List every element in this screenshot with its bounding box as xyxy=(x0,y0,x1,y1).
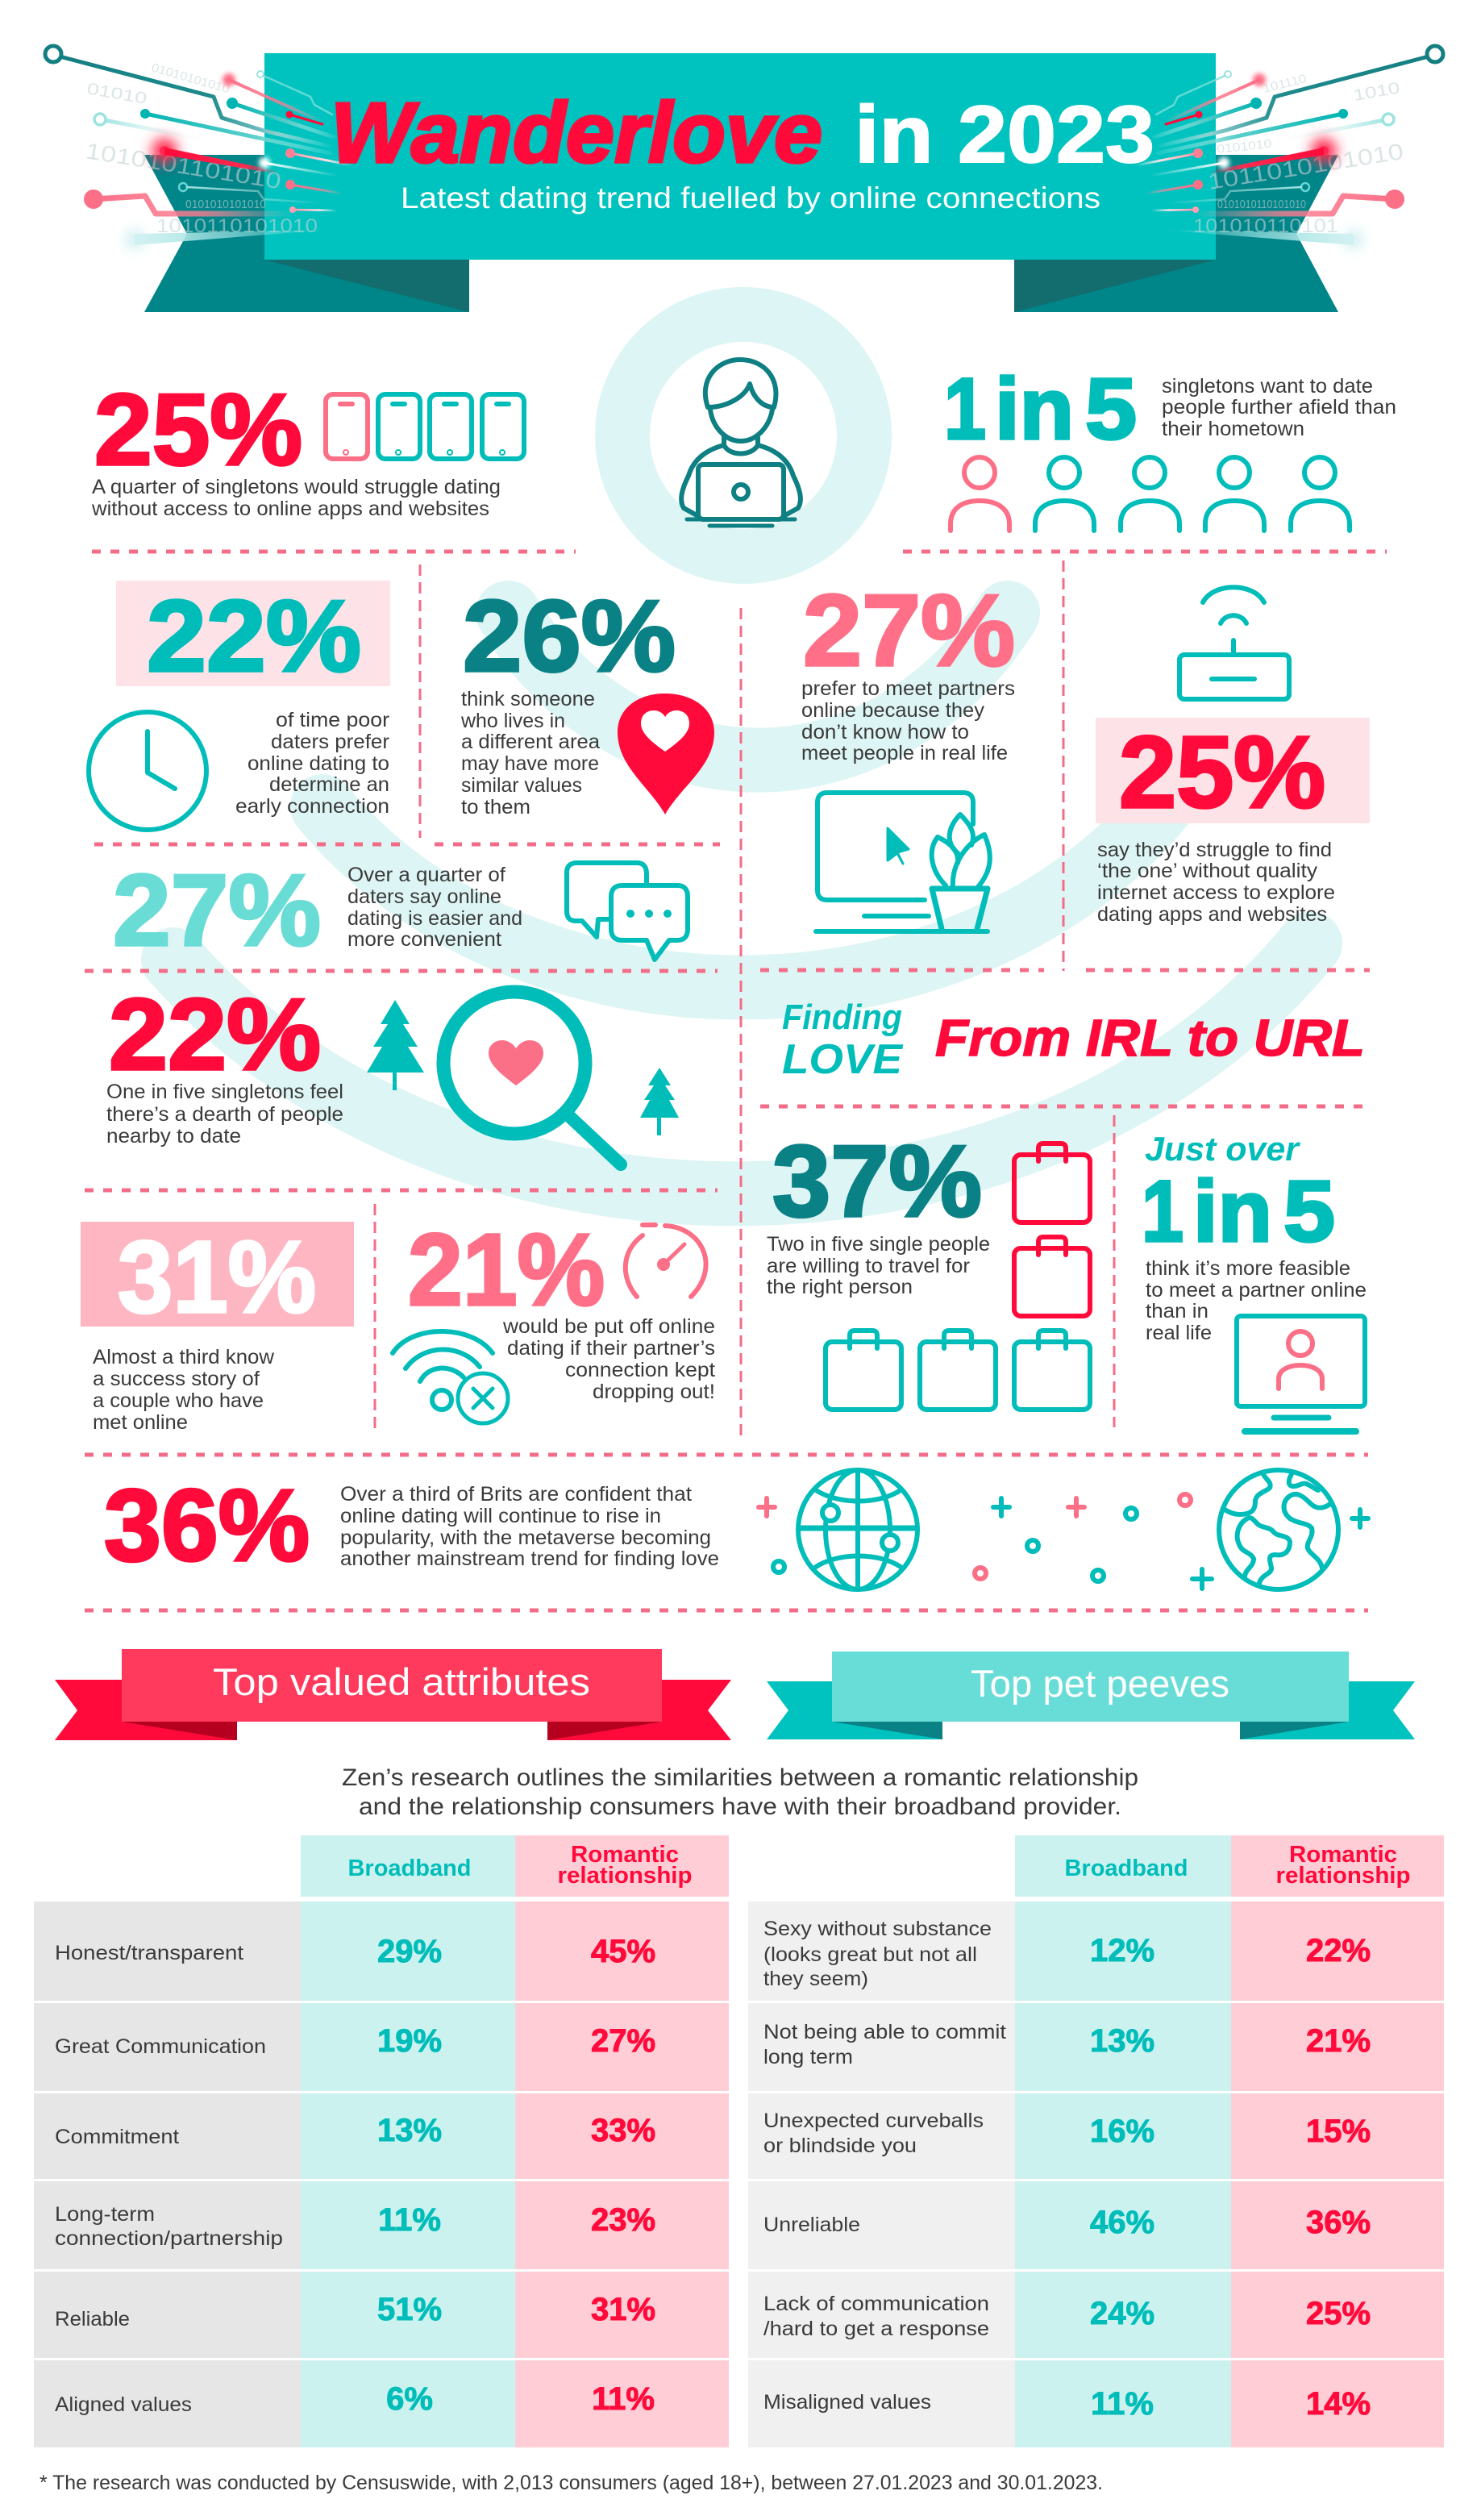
binary digits: 101010110101 xyxy=(1193,215,1338,237)
panel: 25% quality internet xyxy=(1096,715,1370,926)
table: top pet peeves: 36% xyxy=(1306,2205,1371,2240)
table: top valued attributes: 29% xyxy=(377,1934,442,1969)
banner: Top valued attributes xyxy=(55,1649,731,1740)
table: top pet peeves: Romantic xyxy=(1289,1842,1397,1868)
stat: 27% prefer online: meet people in real life xyxy=(801,742,1008,764)
table: top valued attributes: Commitment xyxy=(55,2126,179,2148)
stat: just over 1 in 5: to meet a partner online xyxy=(1146,1279,1367,1302)
heading: From IRL to URL: From IRL to URL xyxy=(935,1009,1365,1067)
stat: 27% prefer online: prefer to meet partners xyxy=(801,677,1015,700)
icon: map pin with heart xyxy=(618,694,714,814)
binary digits xyxy=(84,61,1405,237)
stat: just over 1 in 5: 1 xyxy=(1142,1162,1184,1260)
stat: 27% easier and convenient: more convenient xyxy=(347,928,501,951)
stat: 27% prefer online: online because they xyxy=(801,699,985,722)
panel: 22% time poor daters xyxy=(116,579,390,818)
circuit network right xyxy=(1136,46,1443,249)
panel: 22% time poor daters: 22% xyxy=(147,579,361,693)
stat: 25% struggle without apps: without access to online apps and websites xyxy=(91,498,489,520)
footnote: * The research was conducted by Censuswide, with 2,013 consumers (aged 18+), between 27.01.2023 and 30.01.2023. xyxy=(40,2472,1103,2494)
table: top pet peeves: Unreliable xyxy=(763,2214,860,2236)
stat: 25% struggle without apps: A quarter of singletons would struggle dating xyxy=(92,476,501,498)
stat: 1 in 5 further afield: in xyxy=(995,360,1074,457)
banner: Top pet peeves: Top pet peeves xyxy=(971,1662,1229,1705)
table: top valued attributes: connection/partnership xyxy=(55,2227,283,2250)
heading: Finding Love xyxy=(782,998,903,1083)
icon: trees xyxy=(367,1000,679,1135)
icon: monitor with person xyxy=(1237,1316,1365,1431)
stat: 37% willing to travel: the right person xyxy=(767,1276,913,1298)
stat: 1 in 5 further afield: singletons want to date xyxy=(1162,375,1373,398)
stat: 37% willing to travel: are willing to travel for xyxy=(767,1255,970,1277)
stat: 27% easier and convenient: Over a quarter of xyxy=(347,864,505,886)
binary digits: 0101010110101010 xyxy=(1217,198,1306,211)
binary digits: 1010 xyxy=(1352,79,1401,105)
stat: 22% dearth of people: 22% xyxy=(109,977,321,1091)
icon: five people xyxy=(951,457,1350,531)
table: top pet peeves: Broadband xyxy=(1064,1856,1188,1881)
binary digits: 01010101010 xyxy=(150,61,231,96)
header ribbon xyxy=(144,53,1338,312)
table: top pet peeves: Lack of communication xyxy=(763,2293,989,2315)
icon: suitcases xyxy=(826,1143,1090,1410)
table: top pet peeves: /hard to get a response xyxy=(763,2318,989,2340)
table: top pet peeves: 14% xyxy=(1306,2386,1371,2422)
stat: 1 in 5 further afield: people further afield than xyxy=(1162,396,1396,419)
stat: 36% confident: Over a third of Brits are confident that xyxy=(340,1483,692,1506)
table: top valued attributes: 19% xyxy=(377,2023,442,2059)
stat: 22% dearth of people xyxy=(106,977,343,1148)
panel: 31% success story: 31% xyxy=(118,1220,316,1334)
intro paragraph: Zen’s research outlines the similarities between a romantic relationship xyxy=(342,1764,1138,1791)
decorative plus signs and dots xyxy=(759,1494,1368,1589)
stat: 27% easier and convenient: dating is easier and xyxy=(347,907,522,930)
panel: 22% time poor daters: online dating to xyxy=(248,752,389,775)
stat: 22% dearth of people: One in five singletons feel xyxy=(106,1081,343,1103)
stat: 27% prefer online: 27% xyxy=(803,573,1015,687)
panel: 31% success story: met online xyxy=(93,1411,188,1434)
stat: 26% different area xyxy=(460,579,676,818)
table: top pet peeves: long term xyxy=(763,2046,853,2068)
table: top pet peeves: 15% xyxy=(1306,2114,1371,2149)
stat: 36% confident: 36% xyxy=(104,1468,310,1582)
heading: Finding Love: Finding xyxy=(782,998,902,1037)
table: top pet peeves: 13% xyxy=(1090,2023,1154,2059)
stat: 1 in 5 further afield xyxy=(944,360,1396,457)
table: top valued attributes: Aligned values xyxy=(55,2393,192,2416)
icon: globe with grid xyxy=(798,1470,917,1589)
title: in 2023 xyxy=(855,90,1154,180)
icon: person with laptop xyxy=(681,360,801,526)
table: top valued attributes: Reliable xyxy=(55,2308,130,2330)
table: top valued attributes: 23% xyxy=(591,2202,655,2238)
table: top valued attributes: Long-term xyxy=(55,2203,155,2226)
intro paragraph xyxy=(342,1764,1138,1820)
panel: 22% time poor daters: determine an xyxy=(269,773,389,796)
table: top valued attributes: 31% xyxy=(591,2292,655,2327)
stat: 27% easier and convenient xyxy=(113,853,522,967)
binary digits: 0101010 xyxy=(1217,137,1272,156)
binary digits: 01010 xyxy=(85,80,148,108)
table: top pet peeves: 12% xyxy=(1090,1933,1154,1968)
stat: 21% connection dropping xyxy=(408,1213,715,1403)
stat: 26% different area: to them xyxy=(461,796,530,818)
panel: 25% quality internet: say they’d struggle to find xyxy=(1097,839,1332,861)
stat: 1 in 5 further afield: their hometown xyxy=(1162,418,1304,440)
stat: 27% prefer online xyxy=(801,573,1015,764)
banner: Top pet peeves xyxy=(767,1652,1415,1739)
stat: 36% confident: online dating will continue to rise in xyxy=(340,1505,661,1527)
table: top valued attributes: 11% xyxy=(378,2202,441,2238)
stat: just over 1 in 5: than in xyxy=(1146,1300,1209,1322)
table: top valued attributes: 51% xyxy=(377,2292,442,2327)
panel: 31% success story: a couple who have xyxy=(93,1389,264,1412)
stat: 37% willing to travel: 37% xyxy=(772,1124,982,1238)
panel: 22% time poor daters: early connection xyxy=(235,795,389,818)
table: top valued attributes: 27% xyxy=(591,2023,655,2059)
stat: just over 1 in 5: real life xyxy=(1146,1322,1212,1344)
stat: 37% willing to travel xyxy=(767,1124,990,1298)
binary digits: 1010101101010 xyxy=(84,138,283,194)
table: top valued attributes: relationship xyxy=(558,1863,692,1889)
stat: just over 1 in 5: in xyxy=(1193,1162,1272,1260)
subtitle: Latest dating trend fuelled by online connections xyxy=(401,181,1100,215)
table: top pet peeves: 11% xyxy=(1091,2386,1154,2422)
table: top valued attributes: 11% xyxy=(592,2381,655,2417)
title: Wanderlove xyxy=(331,85,822,181)
table: top pet peeves: 24% xyxy=(1090,2296,1154,2331)
background wifi arcs and ring xyxy=(173,314,1310,1193)
stat: 36% confident: popularity, with the metaverse becoming xyxy=(340,1527,711,1549)
table: top valued attributes: 13% xyxy=(377,2113,442,2148)
stat: 21% connection dropping: would be put off online xyxy=(502,1315,715,1338)
table: top valued attributes: 33% xyxy=(591,2113,655,2148)
panel: 25% quality internet: dating apps and websites xyxy=(1097,903,1327,926)
banner: Top valued attributes: Top valued attributes xyxy=(213,1660,590,1703)
binary digits: 0101010101010 xyxy=(185,198,266,211)
icon: earth globe xyxy=(1219,1470,1338,1589)
stat: 22% dearth of people: nearby to date xyxy=(106,1125,241,1148)
icon: magnifying glass with heart xyxy=(443,992,621,1164)
table: top pet peeves: 25% xyxy=(1306,2296,1371,2331)
icon: wifi with cross xyxy=(393,1331,508,1423)
panel: 31% success story xyxy=(81,1220,354,1434)
icon: four phones xyxy=(326,394,524,459)
panel: 25% quality internet: 25% xyxy=(1119,715,1325,829)
stat: 27% easier and convenient: 27% xyxy=(113,853,321,967)
panel: 22% time poor daters: of time poor xyxy=(276,709,389,731)
stat: 26% different area: similar values xyxy=(461,774,582,797)
stat: 21% connection dropping: connection kept xyxy=(565,1359,715,1381)
stat: 27% prefer online: don’t know how to xyxy=(801,721,969,744)
table: top valued attributes: Broadband xyxy=(348,1856,471,1881)
icon: clock xyxy=(89,712,206,830)
stat: 1 in 5 further afield: 1 xyxy=(944,360,986,457)
table: top pet peeves: 22% xyxy=(1306,1933,1371,1968)
panel: 25% quality internet: ‘the one’ without quality xyxy=(1097,860,1318,882)
stat: 36% confident xyxy=(104,1468,719,1582)
stat: just over 1 in 5 xyxy=(1142,1130,1367,1344)
table: top valued attributes: Romantic xyxy=(571,1842,679,1868)
table: top pet peeves: they seem) xyxy=(763,1968,868,1990)
stat: 26% different area: 26% xyxy=(463,579,676,693)
icon: chat bubbles xyxy=(567,863,688,960)
circuit network left xyxy=(45,46,352,249)
table: top pet peeves: (looks great but not all xyxy=(763,1943,977,1966)
icon: desktop monitor with plant xyxy=(816,793,990,931)
binary digits: 1011010101010 xyxy=(1206,139,1405,194)
binary digits: 101110 xyxy=(1262,72,1308,96)
stat: 26% different area: think someone xyxy=(461,688,595,710)
table: top valued attributes: Honest/transparent xyxy=(55,1942,243,1964)
table: top valued attributes xyxy=(34,1835,729,2447)
panel: 25% quality internet: internet access to explore xyxy=(1097,881,1335,904)
stat: 21% connection dropping: dropping out! xyxy=(593,1381,715,1403)
stat: 25% struggle without apps xyxy=(91,373,501,520)
stat: 26% different area: a different area xyxy=(461,731,600,753)
table: top pet peeves: relationship xyxy=(1275,1863,1411,1889)
binary digits: 1010110101010 xyxy=(156,215,318,237)
table: top pet peeves xyxy=(748,1835,1444,2447)
table: top valued attributes: 6% xyxy=(386,2381,433,2417)
stat: 21% connection dropping: dating if their partner’s xyxy=(507,1337,715,1360)
table: top valued attributes: 45% xyxy=(591,1934,655,1969)
stat: 36% confident: another mainstream trend for finding love xyxy=(340,1547,719,1570)
stat: 26% different area: who lives in xyxy=(460,710,565,732)
table: top pet peeves: 46% xyxy=(1090,2205,1154,2240)
stat: 25% struggle without apps: 25% xyxy=(94,373,302,486)
table: top pet peeves: Misaligned values xyxy=(763,2391,931,2414)
stat: 27% easier and convenient: daters say online xyxy=(347,885,501,908)
table: top pet peeves: Sexy without substance xyxy=(763,1918,992,1940)
stat: just over 1 in 5: Just over xyxy=(1145,1130,1301,1168)
stat: 21% connection dropping: 21% xyxy=(408,1213,605,1327)
stat: 22% dearth of people: there’s a dearth of people xyxy=(106,1103,343,1126)
heading: Finding Love: LOVE xyxy=(782,1036,903,1083)
title xyxy=(331,85,1154,181)
table: top pet peeves: 21% xyxy=(1306,2023,1371,2059)
intro paragraph: and the relationship consumers have with their broadband provider. xyxy=(359,1793,1121,1820)
table: top pet peeves: 16% xyxy=(1090,2114,1154,2149)
stat: 26% different area: may have more xyxy=(461,752,599,775)
icon: speedometer gauge xyxy=(626,1225,706,1297)
stat: just over 1 in 5: 5 xyxy=(1283,1162,1335,1260)
panel: 31% success story: a success story of xyxy=(93,1368,260,1390)
panel: 31% success story: Almost a third know xyxy=(93,1346,275,1368)
icon: router xyxy=(1179,587,1289,699)
table: top pet peeves: Unexpected curveballs xyxy=(763,2110,984,2132)
table: top pet peeves: or blindside you xyxy=(763,2135,917,2157)
table: top pet peeves: Not being able to commit xyxy=(763,2021,1006,2043)
stat: just over 1 in 5: think it’s more feasible xyxy=(1146,1257,1350,1280)
table: top valued attributes: Great Communication xyxy=(55,2035,266,2058)
panel: 22% time poor daters: daters prefer xyxy=(271,731,389,753)
stat: 1 in 5 further afield: 5 xyxy=(1085,360,1137,457)
stat: 37% willing to travel: Two in five single people xyxy=(767,1233,990,1256)
